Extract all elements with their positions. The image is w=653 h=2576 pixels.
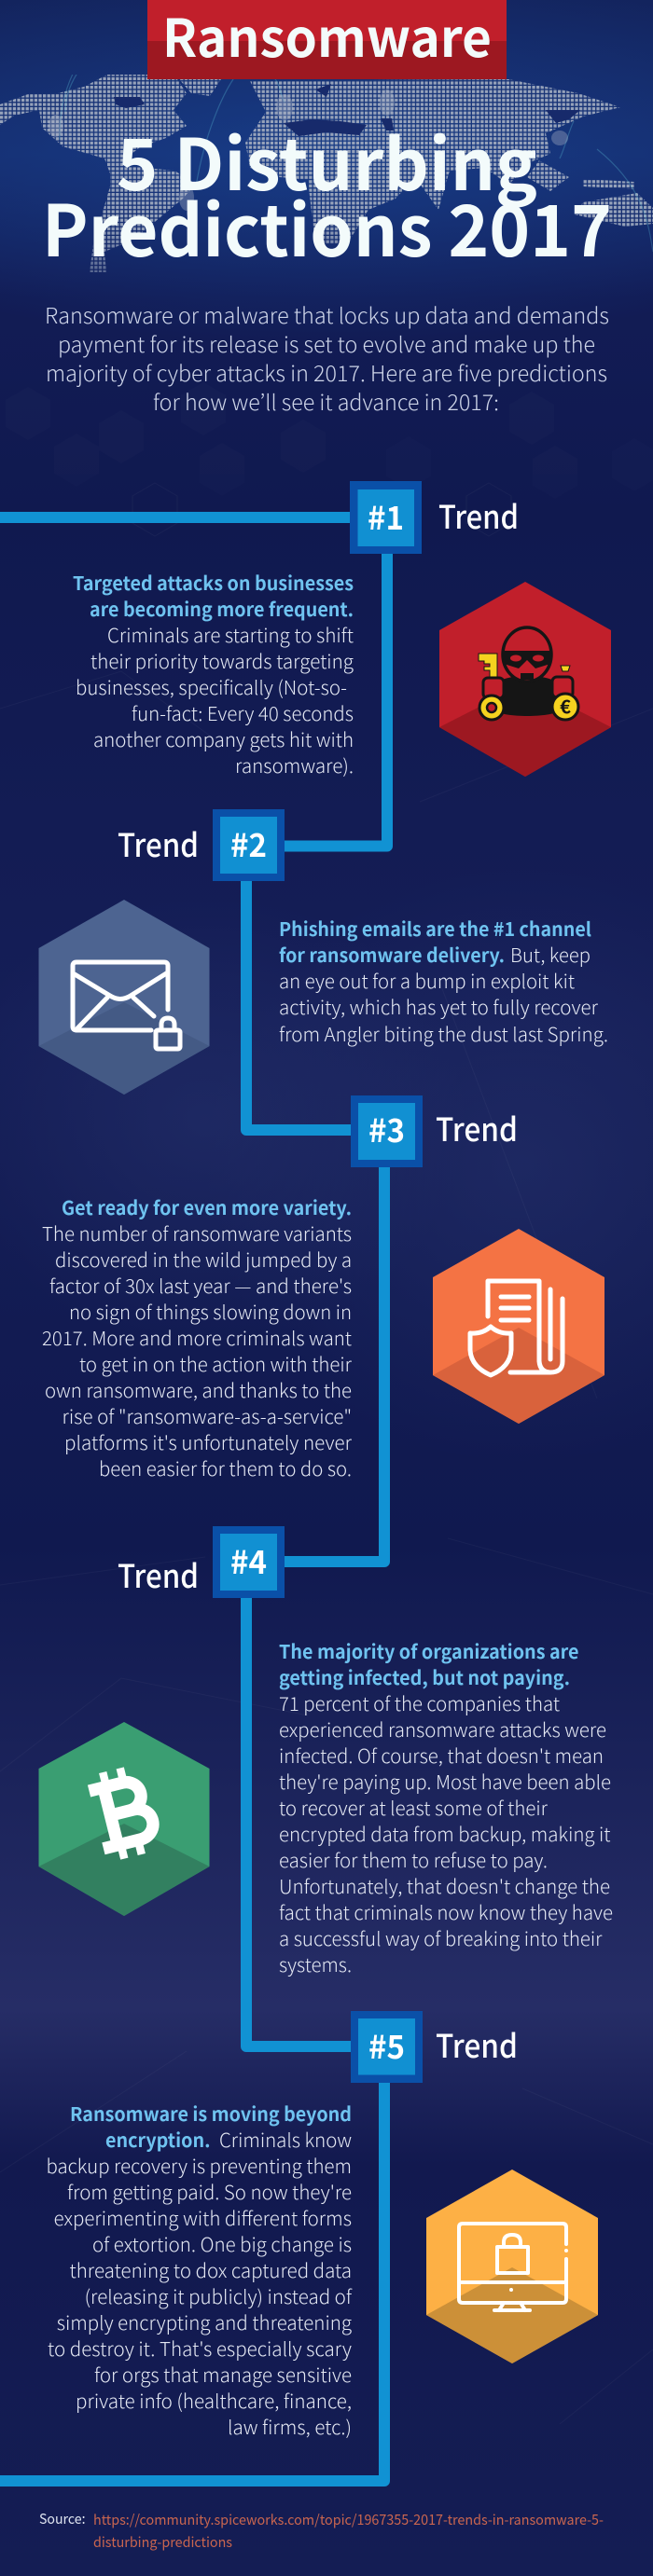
- trend 5 marker: [351, 2011, 518, 2083]
- trend 3 text: [42, 1192, 353, 1481]
- trend 3 text: factor of 30x last year — and there's: [49, 1271, 352, 1299]
- trend 5 text: experimenting with different forms: [54, 2203, 352, 2231]
- trend 2 text: for ransomware delivery.: [279, 940, 505, 968]
- trend 4 marker: Trend: [118, 1550, 199, 1597]
- trend 2 text: Phishing emails are the #1 channel: [279, 914, 591, 942]
- trend 3 text: Get ready for even more variety.: [62, 1192, 352, 1220]
- trend 4 text: a successful way of breaking into their: [279, 1923, 603, 1951]
- trend 3 text: 2017. More and more criminals want: [42, 1323, 352, 1351]
- intro text: payment for its release is set to evolve and make up the: [58, 327, 595, 359]
- trend 2 marker: [118, 809, 285, 881]
- trend 4 text: fact that criminals now know they have: [279, 1897, 613, 1925]
- trend 5 text: of extortion. One big change is: [92, 2229, 352, 2257]
- trend 2 marker: Trend: [118, 820, 199, 866]
- trend 3 marker: #3: [368, 1105, 405, 1151]
- intro text: majority of cyber attacks in 2017. Here are five predictions: [46, 356, 607, 388]
- trend 5 marker: #5: [368, 2021, 405, 2068]
- trend 1 marker: #1: [368, 492, 404, 539]
- intro text: Ransomware or malware that locks up data and demands: [45, 298, 609, 330]
- map: eurasia and africa: [179, 79, 620, 244]
- trend 1 text: ransomware).: [235, 751, 354, 778]
- trend 5 text: private info (healthcare, finance,: [76, 2386, 352, 2414]
- trend 2 text: activity, which has yet to fully recover: [279, 992, 599, 1020]
- trend 2 text: from Angler biting the dust last Spring.: [279, 1019, 608, 1047]
- icon: document with shield on orange hexagon: [433, 1229, 604, 1424]
- intro text: [45, 298, 609, 417]
- trend 1 text: fun-fact: Every 40 seconds: [132, 698, 354, 726]
- banner: [147, 0, 507, 79]
- trend 5 text: law firms, etc.): [228, 2412, 352, 2440]
- trend 3 text: own ransomware, and thanks to the: [45, 1375, 352, 1403]
- trend 5 text: (releasing it publicly) instead of: [85, 2281, 353, 2309]
- trend 4 text: infected. Of course, that doesn't mean: [279, 1741, 604, 1769]
- trend 3 text: rise of "ransomware-as-a-service": [62, 1401, 352, 1429]
- trend 3 text: discovered in the wild jumped by a: [55, 1245, 352, 1273]
- trend 5 text: threatening to dox captured data: [69, 2255, 352, 2283]
- trend 1 marker: [350, 481, 519, 554]
- trend 3 text: been easier for them to do so.: [99, 1453, 352, 1481]
- trend 3 marker: [351, 1095, 518, 1167]
- trend 4 text: Unfortunately, that doesn't change the: [279, 1871, 610, 1899]
- trend 5 text: backup recovery is preventing them: [47, 2151, 352, 2179]
- icon: monitor with padlock on amber hexagon: [426, 2170, 598, 2363]
- source: disturbing-predictions: [93, 2532, 232, 2552]
- trend 5 text: from getting paid. So now they're: [67, 2177, 352, 2205]
- trend 4 text: experienced ransomware attacks were: [279, 1715, 606, 1743]
- title: 5 Disturbing: [117, 108, 537, 211]
- trend 2 text: But, keep: [510, 940, 590, 968]
- trend 1 text: Criminals are starting to shift: [107, 620, 354, 648]
- trend 1 text: another company gets hit with: [93, 724, 354, 752]
- trend 1 text: businesses, specifically (Not-so-: [76, 672, 347, 700]
- trend 5 marker: Trend: [436, 2020, 518, 2067]
- trend 2 marker: #2: [230, 820, 267, 866]
- trend 4 text: [279, 1636, 613, 1977]
- trend 5 text: [47, 2099, 353, 2440]
- icon: criminal with key and money on red hexagon: €: [560, 692, 571, 719]
- source: [39, 2509, 604, 2552]
- trend 1 text: Targeted attacks on businesses: [73, 568, 354, 596]
- trend 4 text: easier for them to refuse to pay.: [279, 1845, 548, 1873]
- map: north and south america: [0, 67, 196, 272]
- trend 4 text: to recover at least some of their: [279, 1793, 549, 1821]
- trend 1 marker: Trend: [438, 491, 519, 538]
- trend 4 text: encrypted data from backup, making it: [279, 1819, 610, 1847]
- source: https://community.spiceworks.com/topic/1967355-2017-trends-in-ransomware-5-: [93, 2510, 604, 2529]
- trend 4 marker: [118, 1526, 285, 1598]
- trend 4 text: The majority of organizations are: [279, 1636, 579, 1664]
- icon: criminal with key and money on red hexagon: [439, 582, 611, 777]
- trend 5 text: Ransomware is moving beyond: [70, 2099, 352, 2127]
- world map: [0, 75, 653, 272]
- trend 4 text: they're paying up. Most have been able: [279, 1767, 611, 1795]
- trend 4 text: getting infected, but not paying.: [279, 1662, 570, 1690]
- timeline connector: [0, 517, 387, 2481]
- trend 3 text: no sign of things slowing down in: [69, 1297, 352, 1325]
- trend 3 text: to get in on the action with their: [79, 1349, 353, 1377]
- title: Predictions 2017: [42, 174, 612, 277]
- trend 1 text: [73, 568, 354, 778]
- trend 5 text: encryption.: [105, 2125, 211, 2153]
- trend 2 text: [279, 914, 608, 1047]
- trend 1 text: their priority towards targeting: [90, 646, 354, 674]
- trend 2 text: an eye out for a bump in exploit kit: [279, 966, 575, 994]
- trend 5 text: for orgs that manage sensitive: [94, 2360, 352, 2388]
- trend 4 marker: #4: [230, 1536, 267, 1583]
- trend 4 text: 71 percent of the companies that: [279, 1688, 560, 1716]
- source: Source:: [39, 2509, 86, 2528]
- trend 3 marker: Trend: [436, 1104, 518, 1150]
- trend 5 text: to destroy it. That's especially scary: [48, 2334, 352, 2362]
- trend 5 text: Criminals know: [219, 2125, 352, 2153]
- trend 1 text: are becoming more frequent.: [90, 594, 354, 622]
- trend 3 text: platforms it's unfortunately never: [64, 1427, 353, 1455]
- trend 5 text: simply encrypting and threatening: [57, 2307, 352, 2335]
- intro text: for how we’ll see it advance in 2017:: [153, 385, 499, 417]
- trend 3 text: The number of ransomware variants: [42, 1219, 352, 1247]
- map: islands and australia: [527, 160, 653, 227]
- icon: envelope with padlock on blue hexagon: [39, 900, 209, 1095]
- icon: bitcoin on green hexagon: [39, 1722, 209, 1916]
- title: [42, 108, 612, 277]
- trend 4 text: systems.: [279, 1949, 352, 1977]
